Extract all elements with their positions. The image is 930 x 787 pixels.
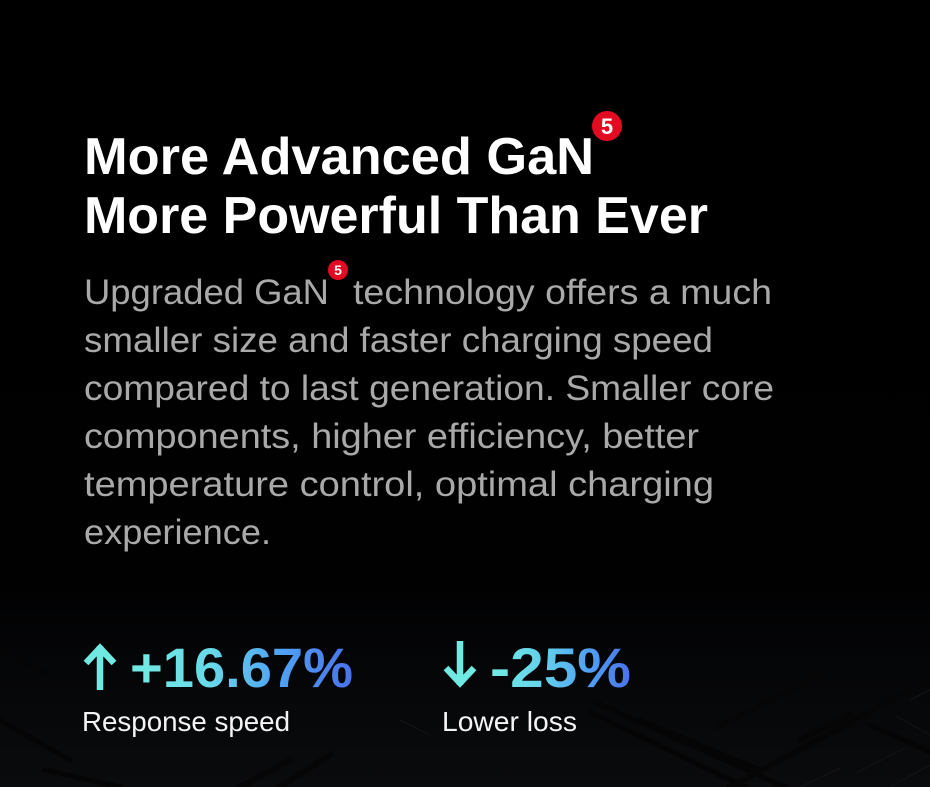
label: response speed: Response speed [82, 706, 290, 737]
stat: response speed [82, 636, 353, 737]
badge: body footnote 5: 5 [334, 262, 342, 278]
badge: title footnote 5 [592, 111, 622, 141]
body paragraph: compared to last generation. Smaller core [84, 369, 774, 408]
body paragraph: components, higher efficiency, better [84, 417, 699, 456]
body paragraph: Upgraded GaN [84, 273, 329, 312]
body paragraph: technology offers a much [353, 273, 772, 312]
circuit board texture [0, 645, 930, 787]
label: lower loss: Lower loss [442, 706, 577, 737]
badge: body footnote 5 [328, 260, 348, 280]
body paragraph [84, 273, 774, 552]
title: More Advanced GaN [84, 128, 594, 186]
body paragraph: experience. [84, 513, 271, 552]
value: -25%: -25% [490, 636, 631, 699]
badge: title footnote 5: 5 [601, 114, 613, 139]
body paragraph: smaller size and faster charging speed [84, 321, 713, 360]
value: +16.67%: +16.67% [130, 636, 353, 699]
body paragraph: temperature control, optimal charging [84, 465, 714, 504]
title [84, 128, 708, 245]
icon: down arrow [446, 641, 474, 685]
stat: lower loss [442, 636, 631, 737]
icon: up arrow [86, 646, 114, 690]
title: More Powerful Than Ever [84, 187, 708, 245]
